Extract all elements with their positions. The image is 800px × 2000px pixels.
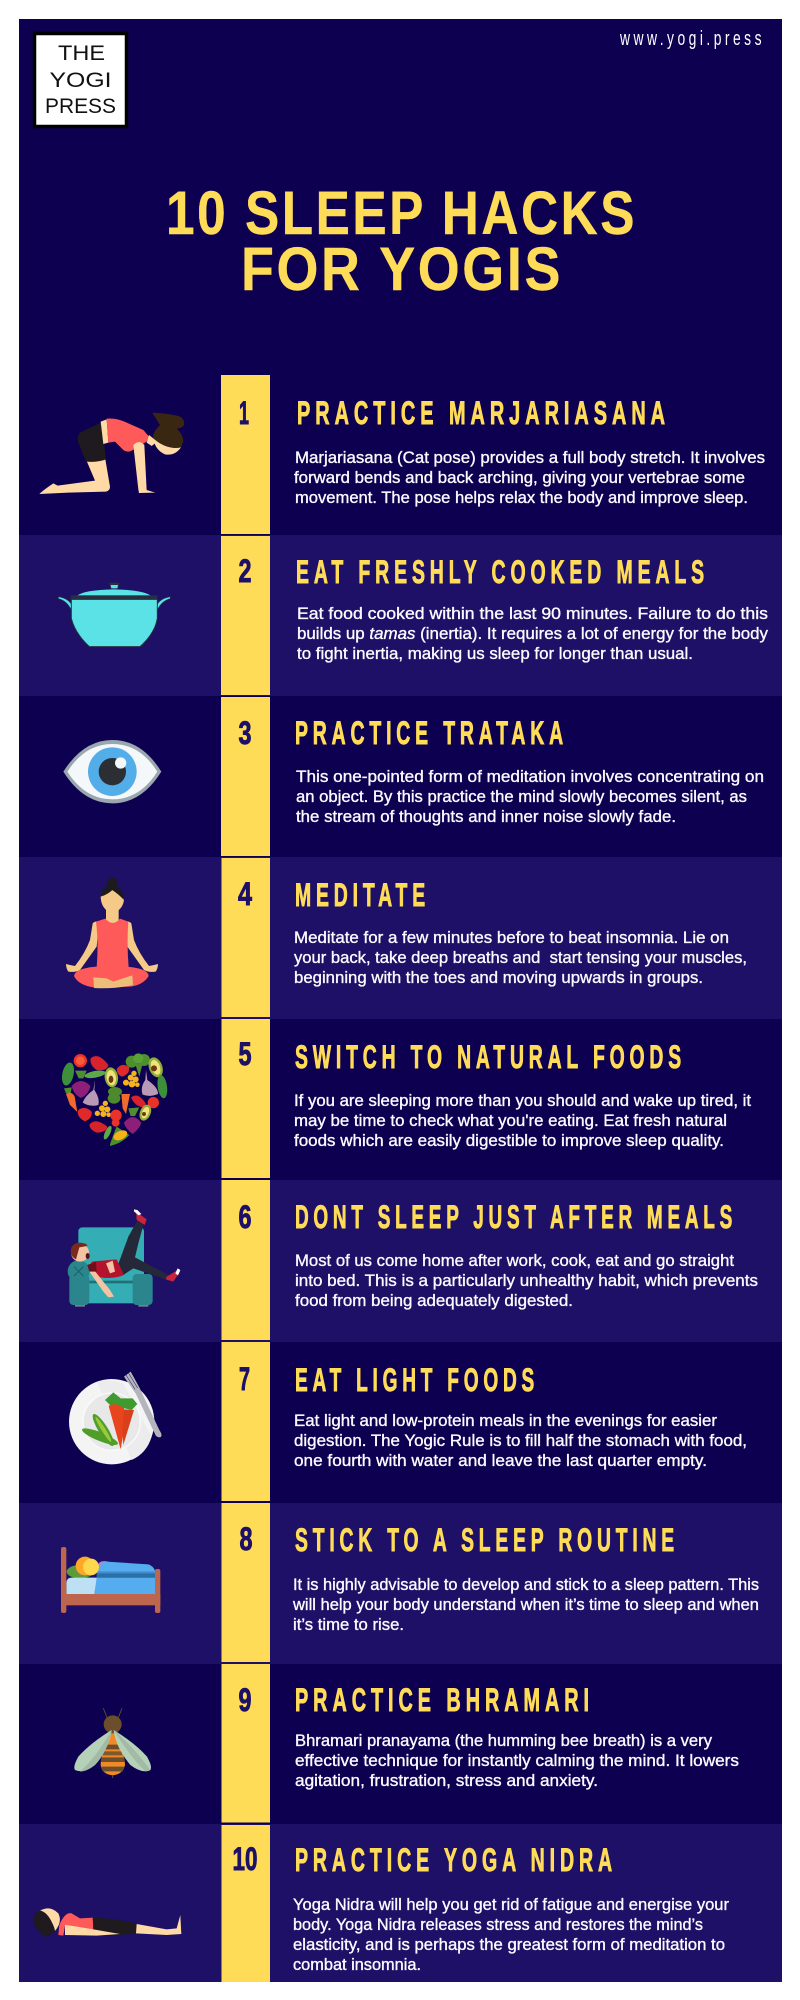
- title: [166, 179, 637, 303]
- number bar 8: [222, 1503, 270, 1662]
- body 4: beginning with the toes and moving upwards in groups.: [294, 969, 703, 987]
- icon: savasana pose: [33, 1908, 181, 1937]
- logo: The Yogi Press: [34, 34, 126, 126]
- body 3: the stream of thoughts and inner noise slowly fade.: [296, 808, 676, 826]
- body 6: food from being adequately digested.: [295, 1292, 573, 1310]
- body 1: Marjariasana (Cat pose) provides a full body stretch. It involves: [295, 449, 765, 467]
- body 5: [294, 1092, 751, 1150]
- body 9: agitation, frustration, stress and anxiety.: [295, 1772, 598, 1790]
- body 10: [293, 1896, 729, 1974]
- heading 9: PRACTICE BHRAMARI: [295, 1682, 594, 1718]
- icon: plate with carrots and peas: [69, 1372, 162, 1464]
- heading 3: PRACTICE TRATAKA: [295, 715, 568, 751]
- row band 2: [19, 535, 782, 696]
- body 3: [296, 768, 764, 826]
- panel: row 8 sleep routine: [19, 1503, 782, 1664]
- body 5: may be time to check what you're eating. Eat fresh natural: [294, 1112, 727, 1130]
- body 8: will help your body understand when it’s time to sleep and when: [292, 1596, 759, 1614]
- body 3: an object. By this practice the mind slowly becomes silent, as: [296, 788, 747, 806]
- number bar 1: [221, 375, 270, 534]
- body 1: movement. The pose helps relax the body and improve sleep.: [295, 489, 748, 507]
- number bar 2: [221, 536, 270, 695]
- row band 6: [19, 1180, 782, 1342]
- body 10: Yoga Nidra will help you get rid of fatigue and energise your: [293, 1896, 729, 1914]
- icon: cooking pot: [58, 583, 170, 647]
- number bar 9: [222, 1664, 270, 1822]
- panel: row 6 after meals: [19, 1180, 782, 1342]
- panel: row 10 yoga nidra: [19, 1824, 782, 1982]
- body 6: into bed. This is a particularly unhealthy habit, which prevents: [295, 1272, 758, 1290]
- body 2: [297, 605, 769, 663]
- body 9: effective technique for instantly calming the mind. It lowers: [295, 1752, 739, 1770]
- number bar 10: [222, 1825, 270, 1982]
- body 7: Eat light and low-protein meals in the evenings for easier: [294, 1412, 718, 1430]
- body 7: digestion. The Yogic Rule is to fill half the stomach with food,: [294, 1432, 747, 1450]
- number 9: 9: [238, 1682, 252, 1718]
- number 3: 3: [238, 715, 252, 751]
- body 8: it’s time to rise.: [293, 1616, 404, 1634]
- row band 10: [19, 1824, 782, 1982]
- body 6: Most of us come home after work, cook, eat and go straight: [295, 1252, 734, 1270]
- body 4: Meditate for a few minutes before to beat insomnia. Lie on: [294, 929, 729, 947]
- body 7: [294, 1412, 747, 1470]
- icon: meditating woman: [66, 878, 158, 988]
- number 7: 7: [239, 1361, 250, 1397]
- body 2: builds up tamas (inertia). It requires a lot of energy for the body: [297, 625, 769, 643]
- body 5: foods which are easily digestible to improve sleep quality.: [294, 1132, 724, 1150]
- number bar 6: [222, 1180, 270, 1340]
- body 10: combat insomnia.: [293, 1956, 421, 1974]
- number 6: 6: [238, 1199, 252, 1235]
- number 5: 5: [238, 1036, 252, 1072]
- icon: bee: [74, 1708, 151, 1778]
- icon: eye: [63, 740, 161, 803]
- heading 4: MEDITATE: [295, 877, 430, 913]
- row band 4: [19, 857, 782, 1019]
- panel: row 1 marjariasana: [39, 375, 765, 534]
- number bar 3: [221, 697, 270, 856]
- panel: row 2 cooked meals: [19, 535, 782, 696]
- number 2: 2: [238, 553, 252, 589]
- number 8: 8: [240, 1521, 252, 1557]
- icon: person in bed: [61, 1547, 160, 1613]
- number bar 7: [222, 1342, 270, 1501]
- panel: row 3 trataka: [63, 697, 764, 856]
- number 4: 4: [238, 876, 252, 912]
- icon: man asleep in armchair: [68, 1209, 180, 1307]
- body 9: Bhramari pranayama (the humming bee breath) is a very: [295, 1732, 713, 1750]
- body 9: [295, 1732, 739, 1790]
- number 1: 1: [239, 395, 249, 431]
- body 4: your back, take deep breaths and start tensing your muscles,: [294, 949, 747, 967]
- body 10: body. Yoga Nidra releases stress and restores the mind’s: [293, 1916, 703, 1934]
- body 5: If you are sleeping more than you should and wake up tired, it: [294, 1092, 751, 1110]
- body 1: [294, 449, 765, 507]
- row band 8: [19, 1503, 782, 1664]
- panel: row 7 light foods: [69, 1342, 747, 1501]
- body 1: forward bends and back arching, giving your vertebrae some: [294, 469, 745, 487]
- body 3: This one-pointed form of meditation involves concentrating on: [296, 768, 764, 786]
- body 2: Eat food cooked within the last 90 minutes. Failure to do this: [297, 605, 768, 623]
- number bar 5: [222, 1019, 270, 1178]
- title: 10 SLEEP HACKS: [166, 179, 637, 247]
- body 7: one fourth with water and leave the last quarter empty.: [294, 1452, 707, 1470]
- panel: row 5 natural foods: [60, 1019, 751, 1178]
- body 8: It is highly advisable to develop and stick to a sleep pattern. This: [293, 1576, 759, 1594]
- heading 7: EAT LIGHT FOODS: [295, 1362, 539, 1398]
- body 2: to fight inertia, making us sleep for longer than usual.: [297, 645, 693, 663]
- logo: The Yogi Press: THE: [58, 42, 105, 65]
- logo: The Yogi Press: YOGI: [50, 69, 112, 92]
- body 8: [292, 1576, 759, 1634]
- body 6: [295, 1252, 758, 1310]
- number bar 4: [222, 858, 270, 1017]
- number 10: 10: [232, 1841, 258, 1877]
- body 4: [294, 929, 747, 987]
- panel: row 4 meditate: [19, 857, 782, 1019]
- logo: The Yogi Press: PRESS: [45, 95, 116, 118]
- panel: row 9 bhramari: [74, 1664, 739, 1822]
- icon: heart of vegetables: [60, 1053, 169, 1146]
- icon: cat pose: [39, 413, 184, 494]
- title: FOR YOGIS: [241, 235, 563, 303]
- body 10: elasticity, and is perhaps the greatest form of meditation to: [293, 1936, 725, 1954]
